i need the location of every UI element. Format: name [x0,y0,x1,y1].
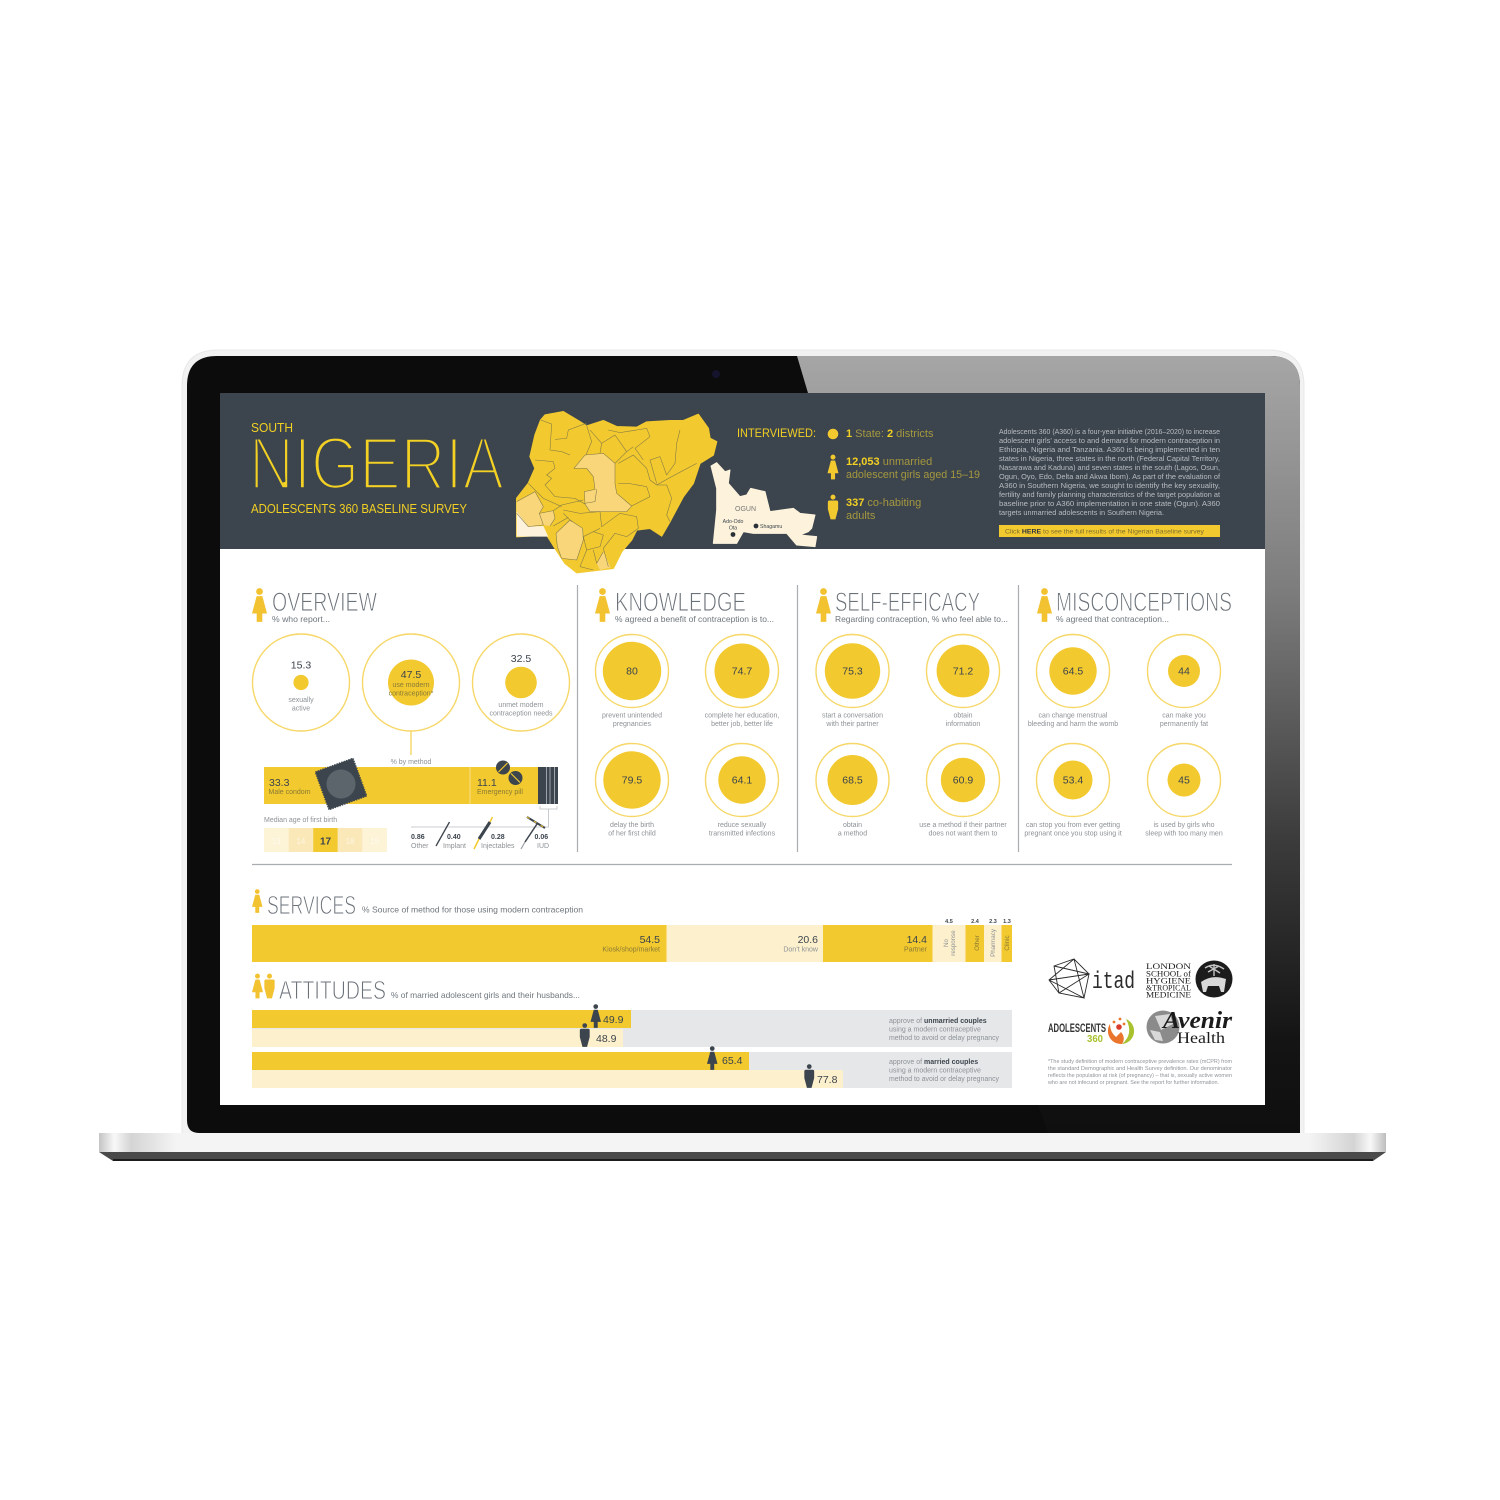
stacked source bar: Clinic [1004,935,1011,951]
row: married couples: 65.4 [722,1055,743,1067]
interviewed stats [737,428,980,522]
stat: complete education: complete her education, [705,712,779,720]
interviewed stats: 337 co-habiting [846,497,921,509]
stat: delay first birth [596,744,668,838]
stat: delay first birth: of her first child [608,830,656,838]
misconceptions heading: % agreed that contraception... [1056,614,1169,624]
stat: start a conversation: 75.3 [842,666,863,678]
median age of first birth [264,817,387,852]
panel: overview [252,587,570,852]
median age of first birth: 14 [296,837,306,846]
stat: delay first birth: delay the birth [610,822,654,829]
interviewed stats: adults [846,510,876,522]
footnote: reflects the population at risk (of pregnancy) – that is, sexually active women [1048,1073,1232,1079]
misconceptions heading: MISCONCEPTIONS [1056,587,1232,617]
interviewed stats: 12,053 unmarried [846,456,932,468]
Ogun labels [723,506,782,537]
intro paragraph: adolescent girls’ access to and demand for modern contraception in [999,436,1220,445]
stat: prevent unintended pregnancies [596,634,668,728]
services heading [252,889,583,920]
logo: LSHTM: &TROPICAL [1146,982,1191,992]
stat: delay first birth: 79.5 [622,774,642,786]
stat: start a conversation: start a conversation [822,712,883,720]
footnote: who are not infecund or pregnant. See the report for further information. [1048,1080,1219,1086]
intro paragraph: A360 in Southern Nigeria, we sought to identify the key sexuality, [999,481,1220,490]
stat: complete education: better job, better life [711,721,773,728]
row: unmarried couples [252,1004,1012,1047]
self-efficacy heading: SELF-EFFICACY [835,587,980,617]
stacked source bar: response [950,930,957,956]
median age of first birth: 13 [272,837,281,846]
overview heading [252,587,377,624]
logo: LSHTM [1146,960,1232,1000]
row: unmarried couples: 48.9 [596,1033,617,1045]
knowledge heading: KNOWLEDGE [615,587,746,617]
Ogun labels: OGUN [735,506,756,513]
stat: unmet need [472,634,570,731]
header band [220,393,1265,573]
logo: itad [1049,959,1135,998]
icon: implant [436,822,450,846]
logo: Adolescents 360: 360 [1087,1033,1103,1045]
median age of first birth: 18 [346,837,355,846]
stat: permanently fat: can make you [1162,712,1206,720]
stat: used by girls [1145,744,1223,838]
link button [999,525,1220,537]
row: married couples: method to avoid or delay pregnancy [889,1076,999,1083]
stat: used by girls: is used by girls who [1153,822,1215,829]
services heading: % Source of method for those using modern contraception [362,904,583,914]
intro paragraph: Adolescents 360 (A360) is a four-year initiative (2016–2020) to increase [999,427,1220,436]
knowledge heading: % agreed a benefit of contraception is to... [615,614,774,624]
intro paragraph: Ethiopia, Nigeria and Tanzania. A360 is being implemented in ten [999,445,1220,454]
stat: obtain a method: 68.5 [842,774,863,786]
stat: use a method without partner: 60.9 [953,774,973,786]
logos [1048,959,1233,1047]
stat: complete education [705,634,779,728]
stat: unmet need: 32.5 [511,653,531,665]
icon: condom [315,758,367,810]
stat: sexually active: 15.3 [291,660,311,672]
services heading: SERVICES [267,890,356,920]
method bar: 33.3 [269,777,290,789]
stat: obtain a method: a method [838,830,867,838]
row: unmarried couples: using a modern contraceptive [889,1026,981,1034]
panel: knowledge [595,587,779,838]
intro paragraph: Nasarawa and Kaduna) and seven states in the south (Lagos, Osun, [999,463,1220,472]
method bar: Male condom [268,789,311,796]
panel: services [252,889,1012,962]
interviewed stats: INTERVIEWED: [737,428,816,440]
logo: itad: itad [1092,969,1135,996]
stat: use a method without partner: use a method if their partner [919,822,1007,829]
stat: reduce infections: transmitted infections [709,830,776,838]
stat: used by girls: sleep with too many men [1145,830,1223,838]
small methods: IUD [537,843,549,850]
title block: NIGERIA [249,422,505,505]
panel: self-efficacy [816,587,1008,838]
screen [220,393,1265,1105]
row: unmarried couples: approve of unmarried couples [889,1018,987,1025]
logo: Avenir Health [1146,1008,1233,1047]
stat: stop you getting pregnant [1024,744,1122,838]
stacked source bar: Kiosk/shop/market [602,946,660,954]
stat: stop you getting pregnant: pregnant once you stop using it [1024,830,1122,838]
stat: prevent unintended pregnancies: prevent unintended [602,712,662,720]
row: unmarried couples: 49.9 [603,1014,624,1026]
column dividers [252,585,1232,864]
attitudes heading: % of married adolescent girls and their husbands... [391,990,580,1000]
stat: prevent unintended pregnancies: 80 [626,666,638,678]
stat: obtain a method [816,744,889,838]
stacked source bar: Other [974,935,981,951]
stat: permanently fat: 44 [1178,666,1190,678]
stacked source bar: 20.6 [798,934,818,946]
stat: prevent unintended pregnancies: pregnancies [613,721,652,728]
Ogun labels: Ado-Odo [723,519,743,525]
method bar [264,731,558,827]
stacked source bar: 54.5 [640,934,660,946]
row: unmarried couples: method to avoid or delay pregnancy [889,1035,999,1042]
small methods: 0.28 [491,834,505,841]
small methods: 0.06 [534,834,548,841]
stat: change menstrual bleeding: 64.5 [1063,666,1083,678]
stat: change menstrual bleeding: can change menstrual [1039,712,1108,720]
stacked source bar: 4.5 [945,919,953,925]
small methods: Other [411,843,429,850]
link button: Click HERE to see the full results of the Nigerian Baseline survey [1005,528,1205,536]
stat: unmet need: contraception needs [489,710,553,718]
intro paragraph: baseline prior to A360 implementation in one state (Ogun). A360 [999,499,1220,508]
intro paragraph: fertility and family planning characteristics of the target population at [999,490,1220,499]
intro paragraph: targets unmarried adolescents in Southern Nigeria. [999,508,1164,517]
stat: reduce infections: reduce sexually [718,822,767,829]
stat: obtain information: obtain [953,712,973,720]
stat: stop you getting pregnant: can stop you from ever getting [1026,822,1120,829]
logo: Adolescents 360 [1048,1018,1134,1045]
stacked source bar: Pharmacy [990,928,997,957]
footnote: the standard Demographic and Health Survey definition. Our denominator [1048,1066,1232,1072]
intro paragraph: Ogun, Oyo, Edo, Delta and Akwa Ibom). As part of the evaluation of [999,472,1221,481]
icon: pills [496,760,522,785]
intro paragraph [999,427,1221,517]
attitudes heading: ATTITUDES [279,975,386,1005]
small methods: Injectables [481,843,515,850]
row: married couples: 77.8 [817,1074,838,1086]
logo: LSHTM: LONDON [1146,961,1191,971]
stat: reduce infections [706,744,778,838]
stacked source bar: 2.4 [971,919,980,925]
interviewed stats: 1 State: 2 districts [846,428,934,440]
stat: use modern contraception: use modern [393,682,430,689]
stat: sexually active [252,634,350,731]
stacked source bar: 14.4 [907,934,927,946]
interviewed stats: adolescent girls aged 15–19 [846,469,980,481]
stat: start a conversation [816,634,889,728]
method bar: % by method [391,759,432,766]
title block: ADOLESCENTS 360 BASELINE SURVEY [251,502,468,516]
stat: use a method without partner [919,744,1007,838]
laptop mockup [99,350,1386,1161]
method bar: 11.1 [477,777,497,789]
small methods: 0.40 [447,834,461,841]
stat: stop you getting pregnant: 53.4 [1063,774,1083,786]
stat: use modern contraception [362,634,460,731]
overview heading: OVERVIEW [272,587,377,617]
stacked source bar: Don’t know [783,946,819,954]
overview heading: % who report... [272,614,330,624]
stat: permanently fat: permanently fat [1160,721,1208,728]
median age of first birth: Median age of first birth [264,817,337,824]
logo: Avenir Health: Avenir [1161,1008,1233,1034]
row: married couples: approve of married couples [889,1059,978,1066]
self-efficacy heading: Regarding contraception, % who feel able to... [835,614,1008,624]
stat: change menstrual bleeding [1028,634,1118,728]
median age of first birth: 19 [370,837,380,846]
attitudes heading [252,974,580,1005]
logo: LSHTM: HYGIENE [1146,976,1191,986]
row: married couples [252,1046,1012,1088]
logo: LSHTM: MEDICINE [1146,990,1191,1000]
stat: permanently fat [1148,634,1220,728]
misconceptions heading [1037,587,1232,624]
knowledge heading [595,587,774,624]
stat: obtain information: information [946,721,980,728]
row: married couples: using a modern contraceptive [889,1068,981,1074]
map of Nigeria [517,412,717,573]
panel: misconceptions [1024,587,1232,838]
logo: Adolescents 360: ADOLESCENTS [1048,1021,1106,1035]
Ogun labels: Shagamu [760,524,782,530]
title block: SOUTH [251,421,293,435]
icon: IUD [521,817,545,849]
stacked source bar [252,919,1012,962]
stat: used by girls: 45 [1178,774,1190,786]
small methods: 0.86 [411,834,425,841]
footnote: *The study definition of modern contraceptive prevalence rates (mCPR) from [1048,1059,1232,1065]
stat: obtain a method: obtain [843,822,862,829]
stat: change menstrual bleeding: bleeding and harm the womb [1028,721,1118,728]
stat: complete education: 74.7 [732,666,752,678]
stat: reduce infections: 64.1 [732,774,752,786]
map of Ogun state [711,463,817,547]
footnote [1048,1059,1232,1086]
logo: Avenir Health: Health [1177,1030,1225,1047]
stat: use modern contraception: contraception* [389,690,434,698]
panel: attitudes [252,974,1012,1088]
stacked source bar: No [943,938,950,947]
stacked source bar: Partner [904,946,928,954]
stat: use a method without partner: does not want them to [929,830,998,838]
stacked source bar: 1.3 [1003,919,1011,925]
stat: start a conversation: with their partner [825,721,879,728]
stat: unmet need: unmet modern [498,702,544,709]
stacked source bar: 2.3 [989,919,997,925]
intro paragraph: states in Nigeria, three states in the north (Federal Capital Territory, [999,454,1220,463]
stat: sexually active: sexually [288,697,314,704]
logo: LSHTM: SCHOOL of [1146,968,1191,978]
median age of first birth: 17 [320,836,331,848]
stat: use modern contraception: 47.5 [401,669,421,681]
Ogun labels: Ota [729,526,737,532]
stat: obtain information: 71.2 [953,666,973,678]
icon: injectable [474,817,492,849]
small methods [411,817,549,850]
self-efficacy heading [816,587,1008,624]
method bar: Emergency pill [477,789,523,796]
stat: sexually active: active [292,706,310,712]
small methods: Implant [443,843,466,850]
stat: obtain information [926,634,1000,728]
